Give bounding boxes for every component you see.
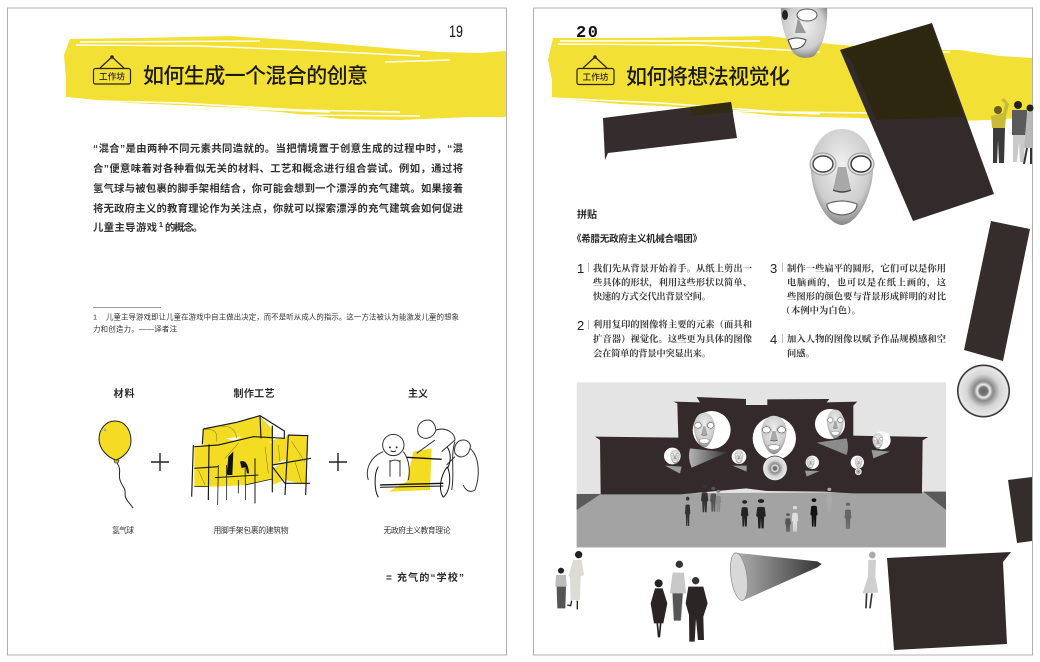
step 3 [770, 261, 947, 316]
page number 19: 19 [449, 22, 463, 41]
adult and child [555, 551, 584, 609]
step 4: 加入人物的图像以赋予作品规模感和空 [787, 333, 947, 345]
heading: work title: 《希腊无政府主义机械合唱团》 [572, 233, 702, 245]
workshop sign icon [577, 55, 614, 84]
page number 20: 20 [576, 24, 598, 43]
megaphone [728, 552, 822, 602]
yellow brush banner: left [64, 36, 506, 120]
footnote [93, 307, 460, 334]
collage: figures at the bottom [555, 551, 878, 642]
step 2: 利用复印的图像将主要的元素（面具和 [593, 318, 752, 330]
workshop sign icon [94, 55, 130, 84]
body text [93, 142, 464, 234]
step 1: 1 [577, 261, 584, 276]
heading: craft: 制作工艺 [234, 387, 274, 400]
body text: 的概念。 [165, 221, 203, 234]
step 3: 3 [770, 261, 777, 276]
step 2: 扩音器）视觉化。这些更为具体的图像 [593, 333, 753, 345]
workshop sign icon: 工作坊 [582, 71, 609, 82]
body text: 氢气球与被包裹的脚手架相结合，你可能会想到一个漂浮的充气建筑。如果接着 [93, 182, 463, 195]
step 3: 电脑画的，也可以是在纸上画的，这 [787, 276, 947, 288]
step 1: 些具体的形状，利用这些形状以简单、 [593, 276, 752, 288]
step 3: 些图形的颜色要与背景形成鲜明的对比 [787, 290, 947, 302]
heading: material: 材料 [114, 387, 134, 400]
body text: 将无政府主义的教育理论作为关注点，你就可以探索漂浮的充气建筑会如何促进 [93, 202, 464, 215]
step 2 [577, 318, 753, 360]
caption: anarchist education: 无政府主义教育理论 [384, 525, 451, 535]
caption: helium balloon: 氢气球 [112, 525, 134, 535]
step 3: 本例中为白色 [791, 304, 847, 316]
step 1: 快速的方式交代出背景空间。 [593, 290, 711, 302]
step 4: 4 [770, 332, 777, 347]
plus sign 1 [151, 453, 169, 471]
icon: children around a table [367, 420, 478, 497]
step 3: ）。 [847, 306, 861, 316]
collage scene: model of the stage [577, 382, 946, 547]
body text: 1 [159, 222, 163, 229]
collage: mask at top [781, 8, 827, 58]
collage: round loudspeaker [957, 364, 1010, 418]
step 1: 我们先从背景开始着手。从纸上剪出一 [593, 262, 753, 274]
plus sign 2 [329, 453, 347, 471]
icon: scaffold building wrapped in yellow [192, 416, 311, 505]
step 2: 2 [577, 318, 584, 333]
scene people [685, 485, 851, 532]
body text: “混合”是由两种不同元素共同造就的。当把情境置于创意生成的过程中时，“混 [93, 142, 464, 155]
collage: big dark rectangle [840, 23, 994, 221]
step 2: 会在简单的背景中突显出来。 [593, 348, 711, 360]
title: right: 如何将想法视觉化 [626, 66, 790, 89]
workshop sign icon: 工作坊 [99, 70, 125, 82]
icon: yellow balloon [99, 421, 133, 508]
step 3: 制作一些扁平的圆形，它们可以是你用 [787, 262, 946, 274]
heading: collage: 拼贴 [577, 208, 597, 221]
scene dark wall [595, 397, 928, 494]
woman standing [863, 552, 878, 608]
collage: group of people on the banner [991, 98, 1034, 164]
yellow brush banner: right [548, 36, 1032, 122]
title: left: 如何生成一个混合的创意 [143, 65, 368, 88]
collage: right dark rectangle [964, 221, 1030, 361]
footnote: 力和创造力。——译者注 [93, 324, 178, 334]
scene background [577, 382, 946, 547]
scene megaphones [665, 438, 890, 481]
body text: 合”便意味着对各种看似无关的材料、工艺和概念进行组合尝试。例如，通过将 [93, 162, 463, 175]
collage: bottom dark speech-bubble shape [887, 552, 1011, 650]
collage: dark speech-bubble shape [603, 102, 737, 160]
step 4: 间感。 [787, 348, 815, 360]
step 1 [577, 261, 753, 302]
panel: left page [8, 8, 506, 655]
result: inflatable school: = 充气的“学校” [386, 571, 464, 584]
scene circles and masks [664, 409, 891, 469]
footnote: 儿童主导游戏即让儿童在游戏中自主做出决定，而不是听从成人的指示。这一方法被认为能激发儿童的想象 [106, 312, 460, 322]
step 4 [770, 332, 947, 360]
step 3: （ [781, 306, 790, 316]
collage: large white mask [810, 129, 874, 225]
footnote: 1 [93, 312, 97, 322]
body text: 儿童主导游戏 [93, 221, 157, 234]
collage: dark shape at right edge [1008, 477, 1032, 543]
heading: ideology: 主义 [408, 387, 428, 400]
group of three viewers [651, 561, 708, 642]
panel: right page [534, 8, 1034, 655]
scene floor [577, 492, 946, 547]
caption: wrapped building: 用脚手架包裹的建筑物 [214, 525, 289, 535]
